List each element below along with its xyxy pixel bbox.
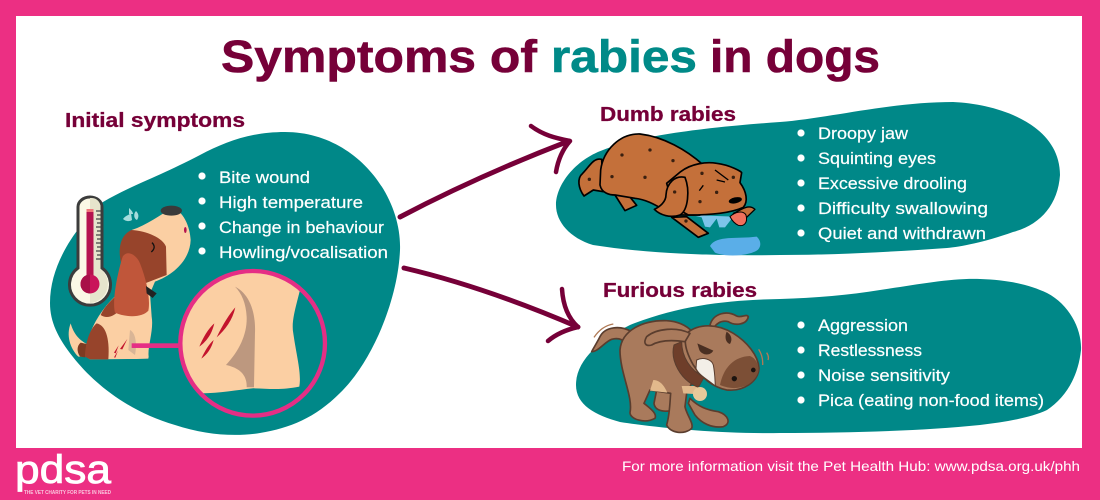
dog nose: [161, 206, 182, 216]
initial symptoms list: Bite wound: [219, 168, 310, 187]
puddle: [710, 237, 760, 255]
initial symptoms blob: [50, 132, 400, 435]
collar: [673, 342, 704, 387]
dog back spot: [101, 293, 119, 317]
initial symptoms list: High temperature: [219, 193, 363, 212]
drool: [692, 215, 733, 227]
dog head patch: [120, 230, 167, 284]
title: [221, 31, 880, 82]
magnified leg: [182, 273, 300, 394]
dumb rabies list: Difficulty swallowing: [818, 199, 988, 218]
belly patch: [650, 380, 698, 394]
initial symptoms heading: Initial symptoms: [65, 110, 245, 132]
tail: [579, 159, 603, 196]
furious rabies list: Pica (eating non-food items): [818, 391, 1044, 410]
panel: initial symptoms: [50, 110, 400, 435]
magnified wound lens: [173, 270, 325, 416]
logo strapline: THE VET CHARITY FOR PETS IN NEED: [24, 490, 111, 496]
connector line: [132, 343, 182, 348]
furious rabies list: [798, 316, 1044, 410]
sores: [588, 148, 735, 223]
back leg: [615, 195, 637, 211]
panel: dumb rabies: [556, 102, 1060, 255]
furious rabies heading: Furious rabies: [603, 280, 757, 302]
dog haunch line: [128, 330, 136, 355]
furious rabies blob: [576, 279, 1081, 433]
panel: furious rabies: [576, 279, 1081, 433]
dumb rabies blob: [556, 102, 1060, 255]
motion marks: [594, 324, 768, 365]
nose and eye: [728, 196, 742, 205]
magnified wounds: [199, 307, 235, 359]
far ear: [710, 313, 748, 328]
pdsa logo: [15, 448, 112, 496]
furious rabies list: Aggression: [818, 316, 908, 335]
body: [600, 134, 703, 215]
furious rabies list: Restlessness: [818, 341, 922, 360]
initial symptoms list: Change in behaviour: [219, 218, 384, 237]
furious rabies list: Noise sensitivity: [818, 366, 951, 385]
arrow to furious rabies: [404, 268, 578, 341]
dumb rabies list: Excessive drooling: [818, 174, 967, 193]
dog small cuts: [114, 339, 127, 358]
dog tail: [69, 323, 87, 357]
front leg: [688, 398, 728, 427]
dog rump patch: [85, 323, 109, 359]
title: in dogs: [710, 31, 880, 82]
dog collar: [146, 286, 157, 298]
head: [667, 163, 746, 215]
footer link text: For more information visit the Pet Health Hub: www.pdsa.org.uk/phh: [622, 458, 1080, 474]
ear: [654, 177, 688, 216]
initial symptoms list: Howling/vocalisation: [219, 243, 388, 262]
teeth: [696, 359, 715, 386]
magnified shadow: [226, 287, 255, 387]
front leg: [672, 217, 708, 237]
icon: angry dog: [592, 313, 768, 432]
dumb rabies list: Quiet and withdrawn: [818, 224, 986, 243]
dumb rabies list: [798, 124, 988, 243]
dumb rabies heading: Dumb rabies: [600, 104, 736, 126]
near ear: [645, 329, 690, 345]
far paw: [733, 207, 755, 217]
dumb rabies list: Droopy jaw: [818, 124, 909, 143]
collar tag: [693, 387, 707, 401]
icon: sweat drops: [123, 208, 138, 221]
dumb rabies list: Squinting eyes: [818, 149, 936, 168]
tongue: [730, 212, 747, 226]
title: Symptoms of: [221, 31, 538, 82]
arrow to dumb rabies: [400, 126, 570, 217]
muzzle patch: [720, 356, 759, 388]
tail: [592, 328, 632, 352]
nostrils: [732, 376, 737, 381]
back paw far: [654, 390, 677, 411]
icon: drooling dog: [579, 134, 760, 255]
head: [685, 326, 759, 390]
dog ear: [114, 253, 149, 316]
dog body: [86, 208, 191, 359]
title: rabies: [551, 31, 697, 82]
body: [620, 321, 703, 432]
logo wordmark: pdsa: [15, 448, 112, 492]
dog eye: [151, 243, 154, 252]
icon: thermometer: [70, 197, 110, 305]
brows: [697, 332, 731, 354]
icon: howling dog: [69, 206, 325, 416]
initial symptoms list: [198, 168, 388, 262]
